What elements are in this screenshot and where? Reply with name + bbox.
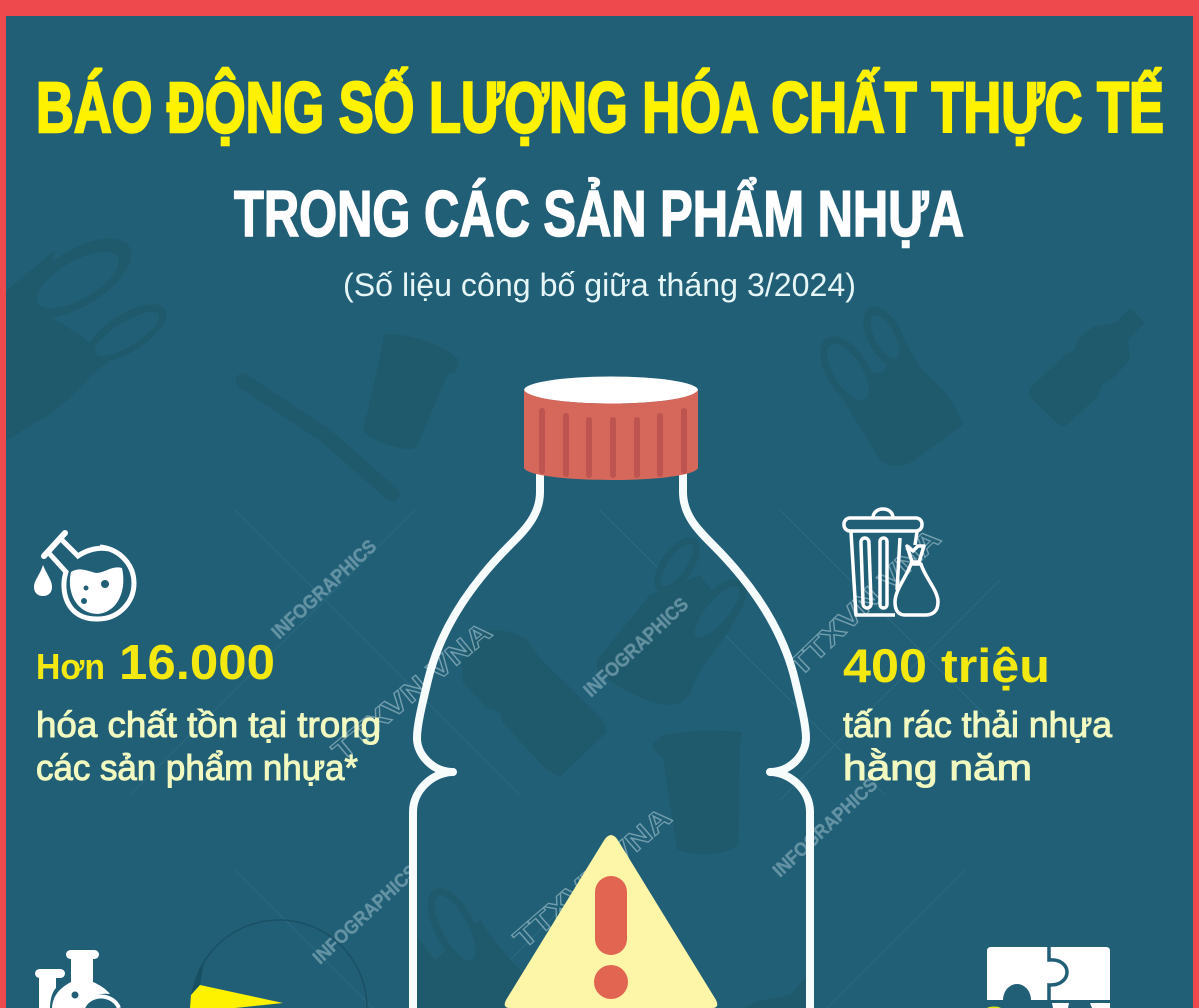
watermarks: TTXVN VNA [326,616,498,767]
watermarks: INFOGRAPHICS [268,536,381,644]
watermarks: INFOGRAPHICS [580,594,693,702]
exclamation mark [594,876,628,999]
watermarks: TTXVN VNA [783,522,947,682]
subtitle: (Số liệu công bố giữa tháng 3/2024) [343,267,856,303]
icon: trash can with bag [844,509,938,615]
silhouette: straw [243,381,392,494]
icon: puzzle [987,947,1110,1008]
bottle outline [413,470,810,1008]
silhouette: bottle inside [462,630,607,777]
title [36,68,1164,250]
silhouette: bottle right [1030,308,1145,426]
bottle cap [524,376,698,480]
silhouette: bag lower inside [416,880,545,1008]
silhouette: bottle lower inside [745,978,805,1008]
icon: flask [34,533,134,619]
watermarks: TTXVN VNA [508,801,677,955]
stat description [36,704,381,788]
silhouette: cup [363,334,459,449]
stat value: 16.000 [119,636,275,690]
warning triangle [505,835,717,1008]
silhouette: bag right [809,300,963,466]
stat description: tấn rác thải nhựa [843,704,1113,745]
stat value [36,636,275,690]
stat value: Hơn [36,646,105,687]
stat: 16.000 chemicals [34,533,381,788]
watermarks [268,522,947,969]
silhouette: bag inside [597,530,757,705]
pie yellow wedge [190,985,283,1008]
icon: lab flasks [35,950,119,1008]
pie outline [191,920,367,1008]
stat: 400 million tons [843,509,1113,788]
watermarks: INFOGRAPHICS [769,774,882,882]
stat description: các sản phẩm nhựa* [36,747,358,788]
stat value: 400 triệu [843,639,1050,692]
pie dark wedge [191,960,204,993]
warning sign [505,835,717,1008]
watermarks: INFOGRAPHICS [309,861,422,969]
silhouette: cup inside [653,731,742,854]
pie chart [190,920,367,1008]
background silhouettes of plastic waste [6,222,1145,1008]
stat description [843,704,1113,788]
bottle [413,376,810,1008]
stat description: hóa chất tồn tại trong [36,704,381,745]
silhouette: bag left [6,222,175,441]
title line 2: TRONG CÁC SẢN PHẨM NHỰA [234,177,964,250]
stat description: hằng năm [843,747,1032,788]
